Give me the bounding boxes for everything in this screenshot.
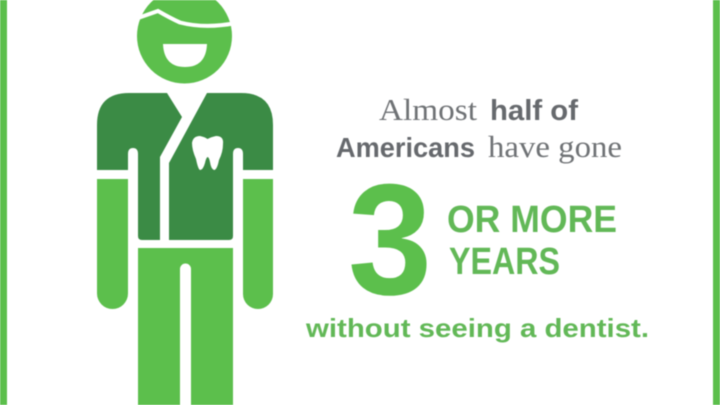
text block: intro line one — [379, 92, 578, 127]
or more years: OR MORE — [447, 199, 617, 241]
icon: tooth — [192, 136, 223, 170]
text block: intro line two — [336, 129, 622, 164]
or more years — [447, 199, 617, 283]
icon: dentist figure — [97, 0, 273, 405]
big number 3: 3 — [348, 152, 432, 328]
text block: intro line two: Americans — [336, 132, 475, 163]
dentist coat — [97, 93, 273, 240]
text block: intro line one: half of — [490, 95, 578, 127]
closing line: without seeing a dentist. — [305, 313, 649, 343]
text block: intro line one: Almost — [379, 92, 477, 127]
trousers — [138, 248, 233, 405]
right arm — [243, 179, 273, 309]
left border — [0, 0, 7, 405]
dentist head — [137, 0, 236, 84]
left arm — [97, 179, 128, 309]
or more years: YEARS — [449, 241, 560, 283]
text block: intro line two: have gone — [488, 129, 622, 164]
right border — [713, 0, 720, 405]
